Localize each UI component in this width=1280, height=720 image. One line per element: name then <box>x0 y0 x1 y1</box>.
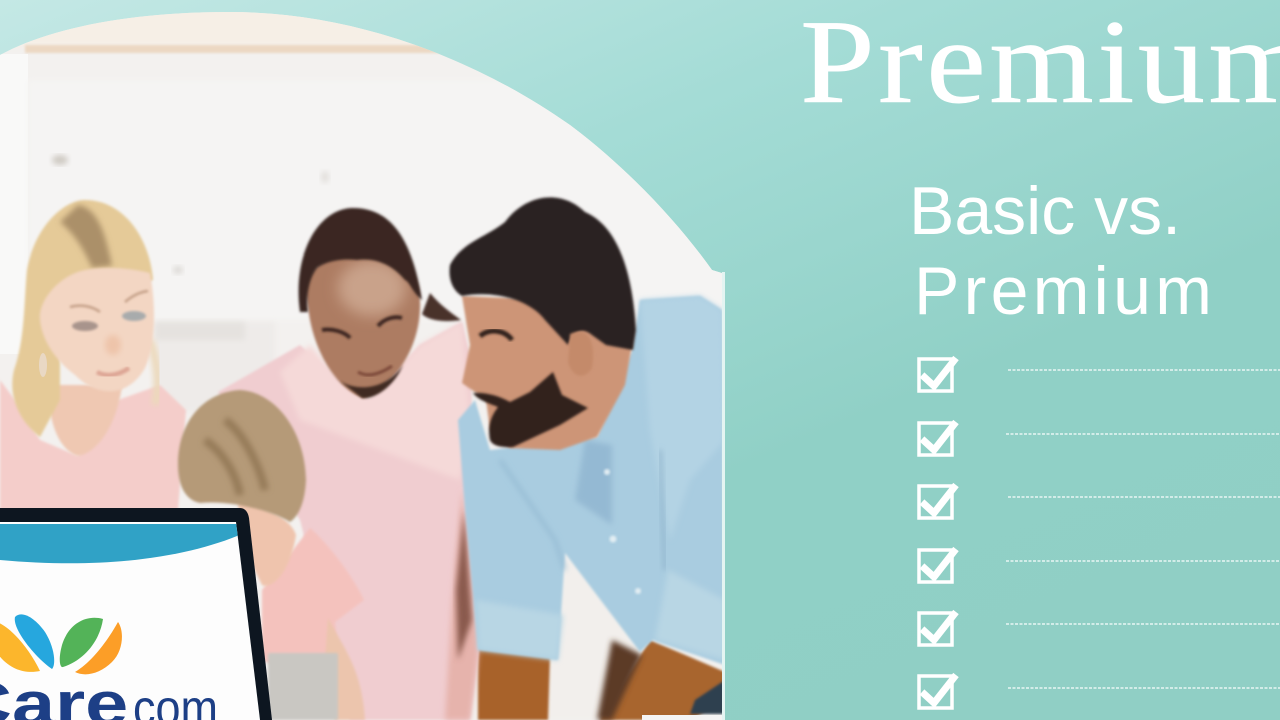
man: arms and back <box>478 640 726 720</box>
check item 4 <box>919 549 1280 582</box>
heading: Basic vs. Premium <box>909 173 1216 329</box>
woman left: hair and face <box>12 200 158 437</box>
photo: family around laptop <box>0 0 730 720</box>
heading: Basic vs. Premium: Premium <box>914 253 1216 329</box>
checklist <box>919 358 1280 708</box>
man: blue shirt <box>458 296 725 665</box>
laptop screen white <box>0 522 270 720</box>
child: hair and shirt <box>178 390 365 720</box>
check item 1 <box>919 358 1280 391</box>
middle woman: head <box>299 208 461 398</box>
check item 3 <box>919 485 1280 518</box>
laptop: frame and screen <box>0 508 272 720</box>
man: head, beard and hair <box>450 197 636 450</box>
laptop screen blue banner <box>0 524 242 563</box>
check item 6 <box>919 675 1280 708</box>
photo right edge highlight <box>722 272 725 720</box>
room background <box>0 0 730 720</box>
middle woman: pink shirt <box>218 322 480 720</box>
logo: four petals <box>0 614 122 674</box>
heading: Basic vs. Premium: Basic vs. <box>909 173 1181 249</box>
check item 5 <box>919 612 1280 645</box>
check item 2 <box>919 422 1280 455</box>
woman left: shirt <box>0 380 186 510</box>
